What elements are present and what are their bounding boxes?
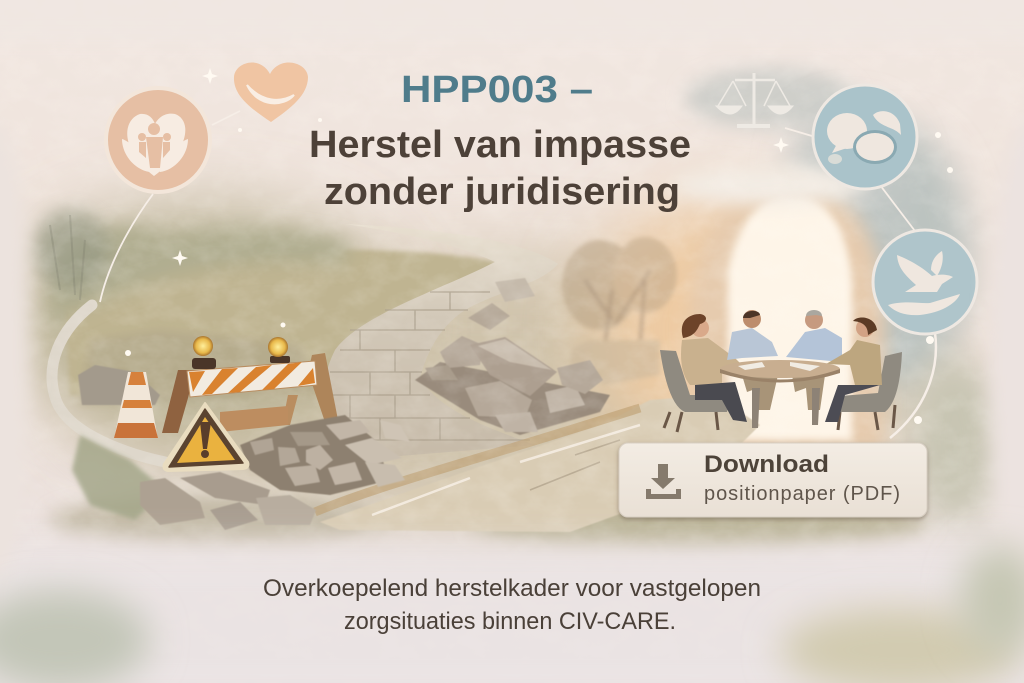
scales icon (716, 73, 793, 128)
connector arcs (100, 111, 936, 438)
arch with light (670, 165, 885, 450)
distant tree (562, 237, 677, 385)
broken stones (140, 415, 410, 530)
icon: heart with hand (234, 62, 308, 122)
curb curve (52, 305, 165, 462)
warning lights (192, 336, 290, 369)
download button (619, 443, 927, 517)
button sublabel: positionpaper (PDF) (704, 483, 900, 505)
rock pile (415, 278, 610, 435)
person 3 (786, 310, 842, 410)
icon: family in hands (106, 88, 210, 192)
subtitle (263, 575, 761, 635)
icon: traffic cone (114, 372, 158, 438)
icon: chair right (838, 352, 902, 430)
round table (720, 360, 840, 428)
road works: boulder and grass (72, 365, 165, 520)
icon: download arrow (646, 464, 681, 499)
subtitle: Overkoepelend herstelkader voor vastgelopen (263, 575, 761, 602)
winding path (322, 224, 558, 460)
title line: main: Herstel van impasse (309, 124, 691, 166)
title line: second: zonder juridisering (324, 171, 680, 213)
person 1 (681, 314, 747, 422)
icon: speech bubbles (813, 85, 917, 189)
button label: Download (704, 451, 829, 478)
lower road (315, 395, 760, 532)
icon: chair left (660, 350, 730, 432)
icon: warning sign (164, 403, 248, 471)
landscape wash (10, 68, 1000, 547)
subtitle: zorgsituaties binnen CIV-CARE. (344, 608, 676, 635)
scattered sparkles (125, 68, 953, 424)
title line: code: HPP003 – (401, 69, 593, 111)
barrier (162, 353, 338, 433)
icon: dove over hand (873, 230, 977, 334)
person 2 (727, 310, 778, 410)
title block (309, 69, 691, 213)
person 4 (825, 318, 882, 422)
meadow (34, 210, 498, 405)
people at table (681, 310, 882, 422)
